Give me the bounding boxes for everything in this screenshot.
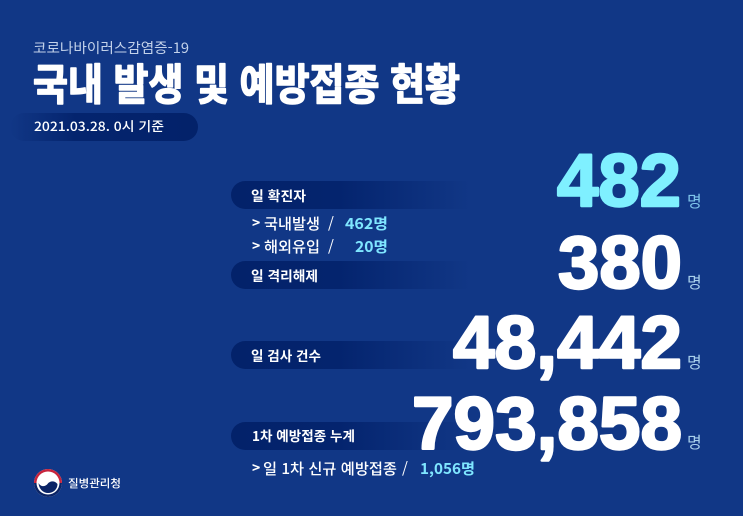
header subtitle: 코로나바이러스감염증-19 (33, 38, 189, 58)
label pill: daily confirmed: 일 확진자 (251, 185, 307, 205)
value: 48,442: 48,442 (453, 301, 682, 384)
icon: taegeuk emblem (34, 469, 62, 497)
label pill: daily released: 일 격리해제 (251, 265, 318, 285)
breakdown: imported: 해외유입 (264, 236, 320, 257)
unit: 명 (687, 269, 702, 293)
label pill: daily released (231, 261, 470, 289)
breakdown: imported: 20명 (355, 236, 388, 257)
label pill: cumulative vaccinations: 1차 예방접종 누계 (252, 425, 355, 445)
breakdown: new first doses: 1,056명 (420, 458, 475, 479)
date pill: 2021.03.28. 0시 기준 (34, 116, 164, 135)
breakdown: new first doses: > (252, 458, 260, 478)
label pill: cumulative vaccinations (231, 422, 470, 450)
agency name: 질병관리청 (68, 475, 121, 491)
breakdown: domestic (252, 213, 388, 234)
breakdown: new first doses: / (402, 458, 408, 479)
row: daily released (231, 221, 702, 304)
breakdown: new first doses: 일 1차 신규 예방접종 (263, 458, 397, 479)
value: 793,858: 793,858 (412, 382, 682, 465)
breakdown: imported: / (328, 236, 334, 257)
date pill (10, 113, 198, 141)
value: 482: 482 (557, 139, 681, 222)
row: cumulative vaccinations (231, 382, 702, 465)
breakdown: domestic: 국내발생 (264, 213, 320, 234)
breakdown: new first doses (252, 458, 475, 479)
breakdown: domestic: / (328, 213, 334, 234)
row: daily tests (231, 301, 702, 384)
row: daily confirmed (231, 139, 702, 222)
label pill: daily confirmed (231, 181, 470, 209)
label pill: daily tests (231, 341, 470, 369)
unit: 명 (687, 349, 702, 373)
label pill: daily tests: 일 검사 건수 (251, 345, 321, 365)
unit: 명 (687, 429, 702, 453)
breakdown: domestic: 462명 (345, 213, 388, 234)
title: 국내 발생 및 예방접종 현황 (33, 51, 460, 113)
breakdown: domestic: > (252, 213, 260, 233)
logo (34, 469, 121, 497)
unit: 명 (687, 188, 702, 212)
value: 380: 380 (558, 221, 682, 304)
breakdown: imported (252, 236, 388, 257)
breakdown: imported: > (252, 236, 260, 256)
